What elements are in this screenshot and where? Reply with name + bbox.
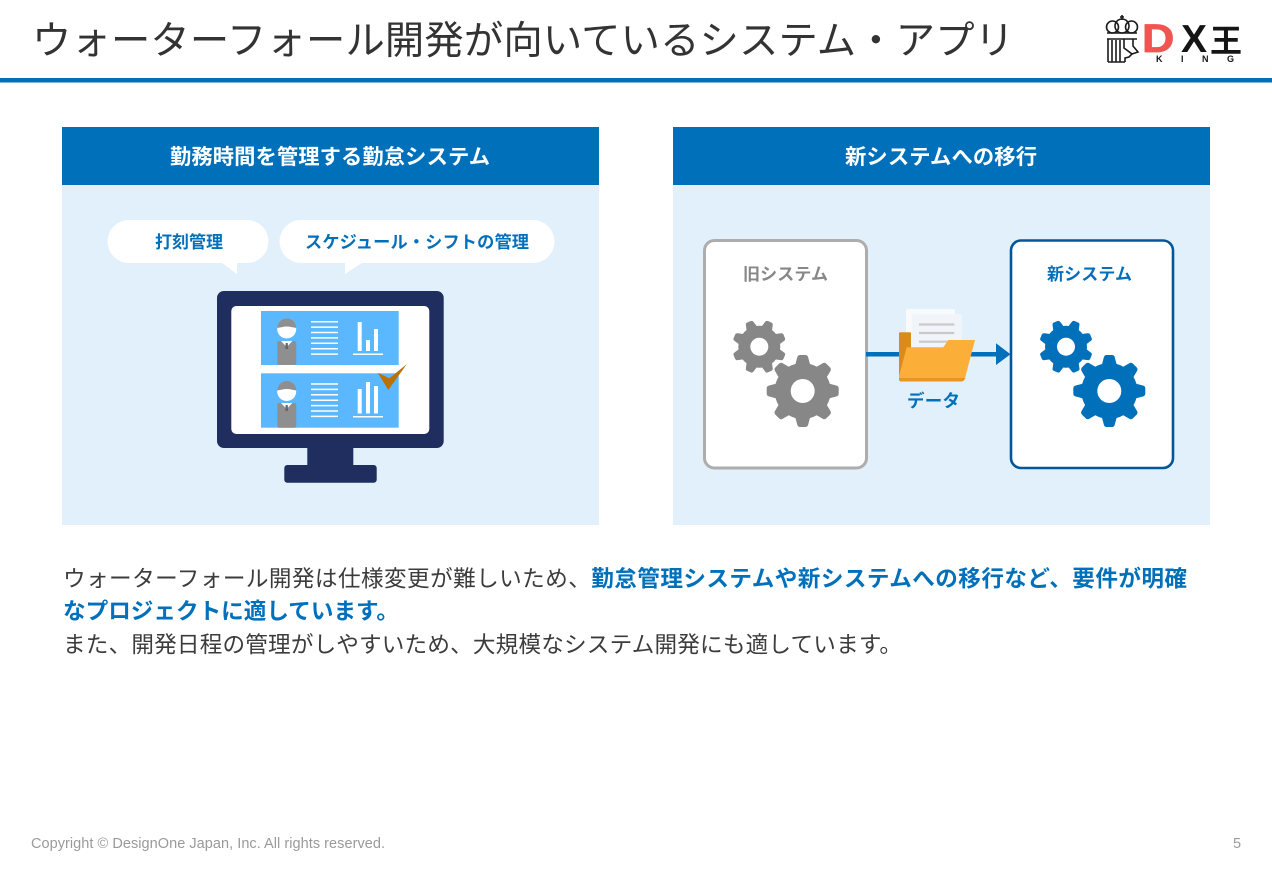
callout: schedule and shift management	[280, 220, 554, 274]
panel: migration to new system	[673, 127, 1210, 525]
title: ウォーターフォール開発が向いているシステム・アプリ	[32, 19, 1014, 63]
panel: attendance system	[62, 127, 599, 525]
page number: 5	[1233, 836, 1241, 852]
logo letter D: D	[1142, 16, 1174, 60]
icon: check mark	[378, 364, 407, 390]
logo: DX King	[1106, 15, 1242, 64]
callout: time stamp management: 打刻管理	[155, 232, 223, 252]
panel header	[62, 127, 599, 185]
panel header	[673, 127, 1210, 185]
panel background	[62, 127, 599, 525]
footer copyright: Copyright © DesignOne Japan, Inc. All rights reserved.	[31, 836, 385, 852]
icon: monitor	[217, 291, 444, 483]
panel heading: 新システムへの移行	[845, 145, 1037, 169]
body text: なプロジェクトに適しています。	[63, 599, 399, 624]
icon: king head	[1106, 15, 1138, 62]
icon: grey gears	[724, 311, 839, 427]
icon: data folder	[899, 309, 975, 382]
new system box: 新システム	[1047, 265, 1132, 284]
body text	[63, 566, 1187, 658]
callout: schedule and shift management: スケジュール・シフトの管理	[305, 232, 529, 252]
monitor card: upper record	[261, 311, 399, 365]
logo letter X: X	[1181, 18, 1207, 61]
logo letter king: 王	[1210, 23, 1242, 59]
arrow: data flow	[866, 343, 1010, 365]
icon: blue gears	[1031, 311, 1145, 427]
new system box	[1011, 240, 1173, 468]
old system box	[704, 240, 866, 468]
panel background	[673, 127, 1210, 525]
panel heading: 勤務時間を管理する勤怠システム	[170, 145, 490, 169]
callout: time stamp management	[108, 220, 268, 274]
logo word KING: KING	[1156, 54, 1234, 64]
old system box: 旧システム	[743, 265, 828, 284]
body text: また、開発日程の管理がしやすいため、大規模なシステム開発にも適しています。	[63, 632, 902, 658]
body text: ウォーターフォール開発は仕様変更が難しいため、勤怠管理システムや新システムへの移行など、要件が明確	[63, 566, 1187, 592]
monitor card: lower record	[261, 373, 399, 428]
top rule	[0, 78, 1272, 82]
data label: データ	[907, 391, 960, 411]
